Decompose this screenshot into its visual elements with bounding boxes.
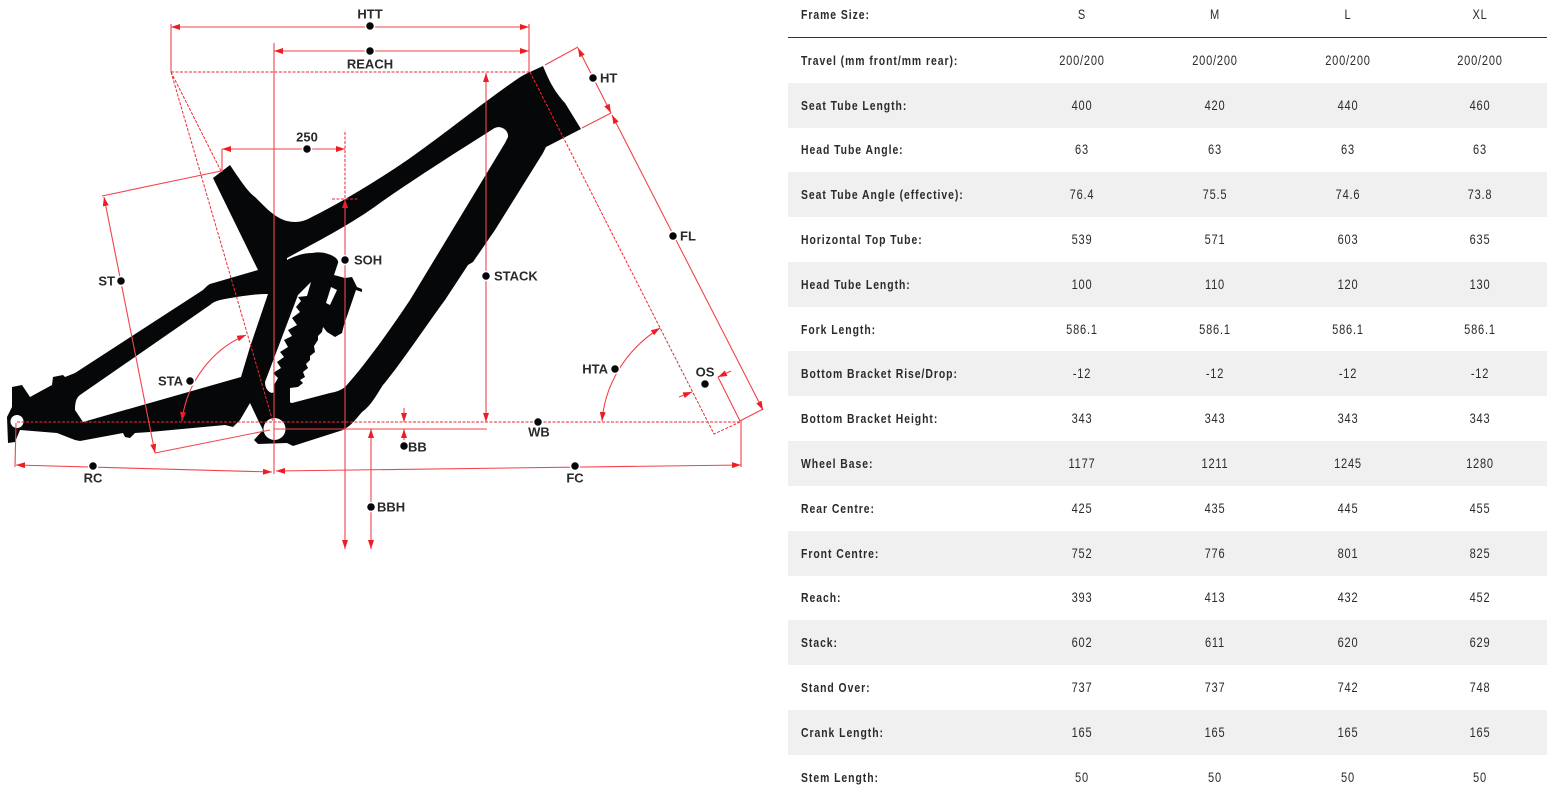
row: Bottom Bracket Height: 343 <box>1205 410 1225 426</box>
row: Crank Length: 165 <box>1072 724 1092 740</box>
row: Stack: 611 <box>1205 634 1225 650</box>
row: Wheel Base: 1177 <box>1069 455 1095 471</box>
row: Wheel Base: 1211 <box>1202 455 1228 471</box>
row: Head Tube Length <box>788 262 1547 307</box>
measurement labels: OS <box>696 364 715 380</box>
row: Stand Over: 742 <box>1338 679 1358 695</box>
datum and reference dashed lines <box>17 72 740 434</box>
row: Head Tube Angle: 63 <box>1208 141 1222 157</box>
row: Front Centre: 752 <box>1072 545 1092 561</box>
measurement labels: 250 <box>296 130 318 144</box>
row: Stem Length: 50 <box>1341 769 1355 785</box>
row: Frame Size <box>801 6 1488 22</box>
row: Head Tube Length: 130 <box>1470 276 1490 292</box>
row: Fork Length: 586.1 <box>1199 321 1231 337</box>
row: Seat Tube Angle: 73.8 <box>1468 186 1492 202</box>
dimension: RC <box>16 465 272 472</box>
row: Bottom Bracket Rise/Drop: -12 <box>1471 365 1489 381</box>
row: Wheel Base: Wheel Base: <box>801 456 873 471</box>
dimension: REACH <box>274 50 529 52</box>
row: Seat Tube Length: 420 <box>1205 97 1225 113</box>
row: Rear Centre: 435 <box>1205 500 1225 516</box>
row: Travel: Travel (mm front/mm rear): <box>801 53 958 68</box>
row: Stand Over: Stand Over: <box>801 680 871 695</box>
row: Front Centre: 801 <box>1338 545 1358 561</box>
row: Stack: 602 <box>1072 634 1092 650</box>
row: Rear Centre: 445 <box>1338 500 1358 516</box>
row: Stand Over: 748 <box>1470 679 1490 695</box>
row: Wheel Base: 1245 <box>1334 455 1362 471</box>
row: Reach: 393 <box>1072 589 1092 605</box>
dimension: 250 <box>222 148 345 150</box>
row: Seat Tube Angle: Seat Tube Angle (effective): <box>801 187 964 202</box>
row: Travel: 200/200 <box>1457 52 1503 68</box>
dimension: BB <box>403 408 405 440</box>
row: Stem Length <box>801 769 1487 785</box>
row: Frame Size: M <box>1210 6 1220 22</box>
row: Seat Tube Length <box>788 83 1547 128</box>
measurement labels: FL <box>680 228 696 244</box>
row: Reach <box>801 589 1490 605</box>
row: Bottom Bracket Rise/Drop: -12 <box>1206 365 1224 381</box>
row: Bottom Bracket Height: 343 <box>1470 410 1490 426</box>
row: Bottom Bracket Rise/Drop: -12 <box>1339 365 1357 381</box>
measurement labels: BBH <box>377 500 405 514</box>
dimension: OS <box>679 371 731 397</box>
row: Head Tube Angle: Head Tube Angle: <box>801 142 904 157</box>
row: Seat Tube Length: 460 <box>1470 97 1490 113</box>
reference solid lines <box>15 24 763 474</box>
row: Seat Tube Angle <box>788 172 1547 217</box>
row: Frame Size: S <box>1078 6 1086 22</box>
dimension: BBH <box>370 429 372 549</box>
row: Stand Over: 737 <box>1205 679 1225 695</box>
row: Front Centre <box>788 531 1547 576</box>
row: Bottom Bracket Height: 343 <box>1072 410 1092 426</box>
row: Frame Size: L <box>1345 6 1351 22</box>
row: Reach: 413 <box>1205 589 1225 605</box>
row: Rear Centre: Rear Centre: <box>801 501 875 516</box>
row: Reach: 452 <box>1470 589 1490 605</box>
dimension: HTA arc <box>602 328 660 421</box>
row: Stand Over <box>801 679 1490 695</box>
row: Head Tube Length: Head Tube Length: <box>801 277 911 292</box>
row: Bottom Bracket Rise/Drop: -12 <box>1073 365 1091 381</box>
measurement labels: ST <box>98 274 115 288</box>
row: Horizontal Top Tube: 571 <box>1205 231 1225 247</box>
measurement labels: STA <box>158 374 184 388</box>
row: Fork Length <box>801 321 1496 337</box>
row: Horizontal Top Tube: 635 <box>1470 231 1490 247</box>
row: Rear Centre <box>801 500 1490 516</box>
row: Horizontal Top Tube: 539 <box>1072 231 1092 247</box>
row: Travel: 200/200 <box>1192 52 1238 68</box>
row: Frame Size: XL <box>1472 6 1488 22</box>
row: Wheel Base: 1280 <box>1466 455 1494 471</box>
row: Seat Tube Angle: 76.4 <box>1070 186 1094 202</box>
dimension: ST <box>104 197 155 453</box>
measurement dots <box>88 22 710 512</box>
row: Bottom Bracket Height <box>801 410 1490 426</box>
row: Stack: 629 <box>1470 634 1490 650</box>
row: Wheel Base <box>788 441 1547 486</box>
row: Fork Length: 586.1 <box>1332 321 1364 337</box>
row: Travel <box>801 52 1503 68</box>
row: Crank Length: 165 <box>1338 724 1358 740</box>
row: Travel: 200/200 <box>1325 52 1371 68</box>
row: Seat Tube Angle: 75.5 <box>1203 186 1227 202</box>
header rule <box>788 37 1547 38</box>
row: Bottom Bracket Height: 343 <box>1338 410 1358 426</box>
dimension: HT <box>578 48 611 113</box>
row: Rear Centre: 425 <box>1072 500 1092 516</box>
measurement labels <box>84 6 715 514</box>
row: Seat Tube Angle: 74.6 <box>1336 186 1360 202</box>
row: Bottom Bracket Rise/Drop <box>788 351 1547 396</box>
row: Bottom Bracket Height: Bottom Bracket Height: <box>801 411 938 426</box>
row: Stack: 620 <box>1338 634 1358 650</box>
row: Head Tube Angle: 63 <box>1473 141 1487 157</box>
row: Fork Length: 586.1 <box>1066 321 1098 337</box>
measurement labels: WB <box>528 424 550 440</box>
row: Horizontal Top Tube: Horizontal Top Tube: <box>801 232 923 247</box>
measurement labels: HTA <box>582 362 609 376</box>
row: Crank Length: Crank Length: <box>801 725 884 740</box>
row: Seat Tube Length: 400 <box>1072 97 1092 113</box>
row: Front Centre: Front Centre: <box>801 546 879 561</box>
dimension: FL <box>612 115 763 410</box>
row: Crank Length <box>788 710 1547 755</box>
bike geometry diagram <box>7 6 764 549</box>
row: Travel: 200/200 <box>1059 52 1105 68</box>
row: Crank Length: 165 <box>1470 724 1490 740</box>
row: Stem Length: 50 <box>1208 769 1222 785</box>
measurement labels: BB <box>408 440 427 454</box>
dimension: FC <box>276 465 741 471</box>
row: Head Tube Angle: 63 <box>1075 141 1089 157</box>
frame silhouette <box>7 66 581 446</box>
row: Reach: 432 <box>1338 589 1358 605</box>
dimension lines <box>15 24 763 549</box>
measurement labels: HTT <box>357 6 383 22</box>
geometry table <box>788 6 1547 785</box>
row: Head Tube Length: 120 <box>1338 276 1358 292</box>
row: Seat Tube Length: 440 <box>1338 97 1358 113</box>
measurement labels: STACK <box>494 268 538 284</box>
dimension: SOH <box>344 199 346 549</box>
row: Crank Length: 165 <box>1205 724 1225 740</box>
measurement labels: REACH <box>347 56 393 72</box>
measurement labels: FC <box>566 470 584 486</box>
row: Head Tube Angle <box>801 141 1487 157</box>
row: Head Tube Angle: 63 <box>1341 141 1355 157</box>
row: Front Centre: 776 <box>1205 545 1225 561</box>
dimension: HTT <box>171 26 529 28</box>
row: Head Tube Length: 110 <box>1205 276 1225 292</box>
row: Bottom Bracket Rise/Drop: Bottom Bracket Rise/Drop: <box>801 366 958 381</box>
row: Horizontal Top Tube <box>801 231 1490 247</box>
row: Front Centre: 825 <box>1470 545 1490 561</box>
dimension: STA arc <box>182 335 246 421</box>
row: Fork Length: Fork Length: <box>801 322 876 337</box>
row: Rear Centre: 455 <box>1470 500 1490 516</box>
row: Head Tube Length: 100 <box>1072 276 1092 292</box>
rear shock <box>260 252 362 402</box>
measurement labels: HT <box>600 70 617 86</box>
row: Stem Length: Stem Length: <box>801 770 879 785</box>
row: Reach: Reach: <box>801 590 841 605</box>
row: Fork Length: 586.1 <box>1464 321 1496 337</box>
row: Stack: Stack: <box>801 635 838 650</box>
row: Frame Size: Frame Size: <box>801 7 870 22</box>
dimension: STACK <box>485 73 487 422</box>
measurement labels: RC <box>84 470 103 486</box>
measurement labels: SOH <box>354 252 382 268</box>
row: Stem Length: 50 <box>1075 769 1089 785</box>
row: Stem Length: 50 <box>1473 769 1487 785</box>
row: Seat Tube Length: Seat Tube Length: <box>801 98 907 113</box>
row: Stand Over: 737 <box>1072 679 1092 695</box>
row: Stack <box>788 620 1547 665</box>
row: Horizontal Top Tube: 603 <box>1338 231 1358 247</box>
